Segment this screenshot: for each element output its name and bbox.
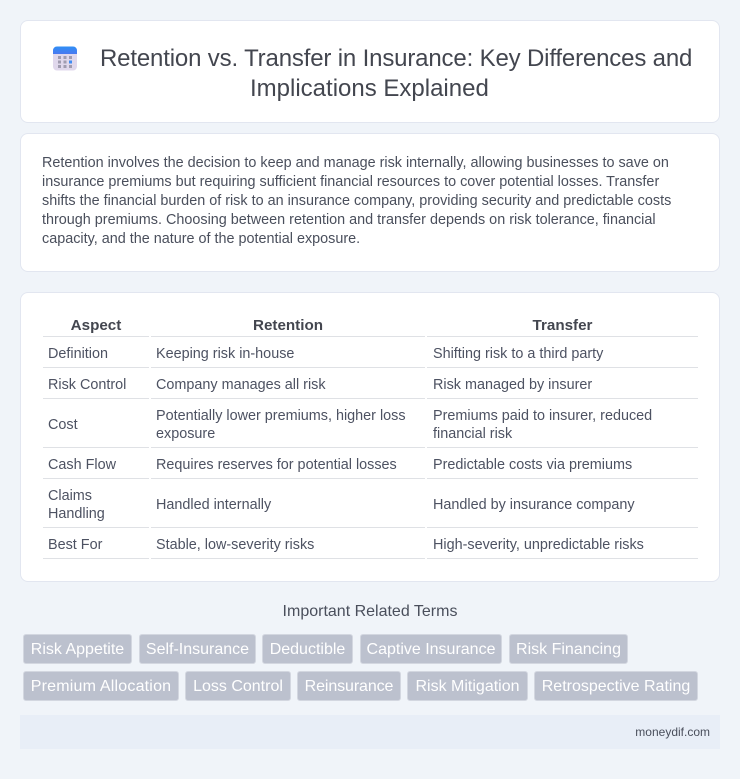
header row: Aspect [71,317,121,334]
row: claims handling: Handling [48,506,105,522]
comparison table: High-severity, unpredictable risks [433,537,644,553]
title [100,45,692,102]
comparison table: Shifting risk to a third party [433,346,603,362]
comparison table: Requires reserves for potential losses [156,457,397,473]
comparison table: Keeping risk in-house [156,346,294,362]
comparison table: exposure [156,426,215,442]
title: Implications Explained [250,75,489,102]
row: cost: Cost [48,417,78,433]
comparison table: Potentially lower premiums, higher loss [156,408,406,424]
comparison table: Handled internally [156,497,271,513]
intro paragraph: Retention involves the decision to keep and manage risk internally, allowing businesses to save on [42,155,669,171]
related terms tags: Premium Allocation [31,678,171,695]
comparison table: Premiums paid to insurer, reduced [433,408,652,424]
row: best for: Best For [48,537,102,553]
intro paragraph: insurance premiums but requiring sufficient financial resources to cover potential losses. Transfer [42,174,659,190]
icon: calendar [53,46,77,70]
comparison table [43,317,698,559]
comparison table: Predictable costs via premiums [433,457,632,473]
footer source: moneydif.com [635,725,710,739]
row: definition: Definition [48,346,108,362]
footer bar [20,715,720,749]
panel: title card [20,20,720,123]
related terms tags: Captive Insurance [367,641,495,658]
intro paragraph: through premiums. Choosing between retention and transfer depends on risk tolerance, financial [42,212,656,228]
related terms tags: Risk Appetite [31,641,124,658]
related terms tags: Loss Control [193,678,283,695]
related terms tags [23,634,698,701]
panel: comparison table [20,292,720,582]
row: claims handling: Claims [48,488,92,504]
intro paragraph: capacity, and the nature of the potential exposure. [42,231,360,247]
related terms tags: Self-Insurance [146,641,249,658]
intro paragraph [42,155,671,247]
row: claims handling [48,488,105,522]
related terms heading: Important Related Terms [283,603,457,620]
row: risk control: Risk Control [48,377,126,393]
comparison table: Retention [253,317,323,334]
related terms tags: Risk Financing [516,641,621,658]
comparison table: Transfer [533,317,592,334]
comparison table: Handled by insurance company [433,497,635,513]
row: cash flow: Cash Flow [48,457,116,473]
comparison table: Risk managed by insurer [433,377,592,393]
intro paragraph: shifts the financial burden of risk to an insurance company, providing security and predictable costs [42,193,671,209]
panel: intro text [20,133,720,272]
title: Retention vs. Transfer in Insurance: Key Differences and [100,45,692,72]
related terms tags: Deductible [270,641,345,658]
related terms tags: Risk Mitigation [415,678,520,695]
related terms tags: Reinsurance [305,678,393,695]
comparison table: Stable, low-severity risks [156,537,314,553]
related terms tags: Retrospective Rating [542,678,690,695]
comparison table: financial risk [433,426,512,442]
comparison table: Company manages all risk [156,377,326,393]
